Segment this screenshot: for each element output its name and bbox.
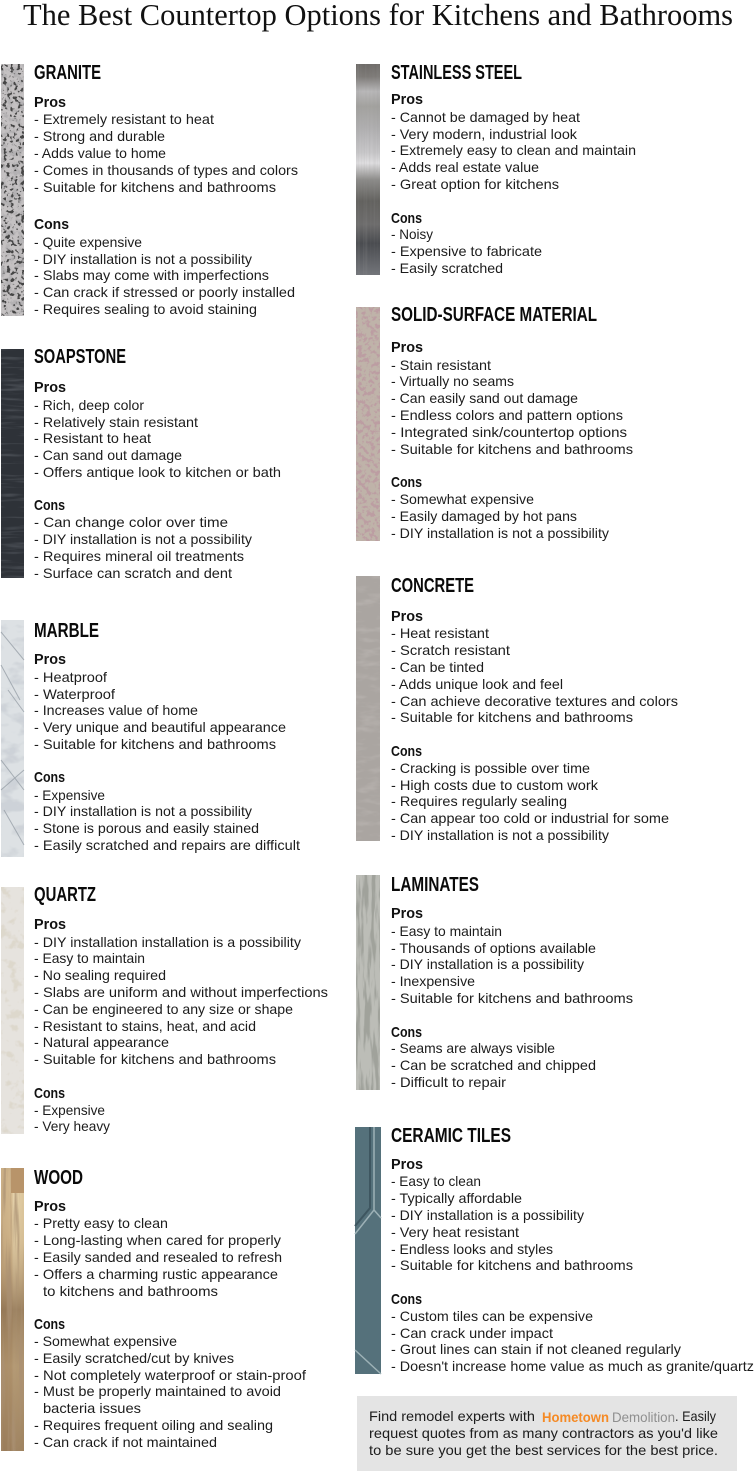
heading: concrete: CONCRETE — [391, 575, 474, 597]
cons: soapstone: - Can change color over time — [34, 514, 228, 530]
pros: wood: to kitchens and bathrooms — [43, 1283, 218, 1299]
cons: wood: - Not completely waterproof or stain-proof — [34, 1367, 306, 1383]
pros: solid-surface material: - Integrated sink/countertop options — [391, 424, 627, 440]
panel: soapstone — [1, 346, 281, 581]
pros: solid-surface material — [391, 339, 633, 457]
panel: wood — [1, 1167, 306, 1451]
texture: solid-surface strip — [356, 307, 380, 541]
panel: ceramic tiles — [355, 1125, 754, 1374]
cons: soapstone: - Requires mineral oil treatments — [34, 548, 244, 564]
cons: soapstone: - DIY installation is not a possibility — [34, 531, 252, 547]
cons: laminates: - Seams are always visible — [391, 1040, 555, 1056]
pros: ceramic tiles — [391, 1156, 633, 1273]
texture: marble strip — [1, 620, 24, 857]
pros: quartz: - Natural appearance — [34, 1034, 169, 1050]
texture: ceramic tile strip — [355, 1127, 381, 1374]
cons: ceramic tiles: - Doesn't increase home value as much as granite/quartz — [391, 1358, 754, 1374]
cons: quartz — [34, 1085, 110, 1134]
pros: concrete — [391, 608, 678, 725]
pros: concrete: - Suitable for kitchens and bathrooms — [391, 709, 633, 725]
pros: wood: Pros — [34, 1198, 66, 1215]
cons: concrete: Cons — [391, 743, 422, 760]
pros: quartz: - Can be engineered to any size or shape — [34, 1001, 293, 1017]
pros: stainless steel — [391, 91, 636, 192]
logo: Hometown Demolition — [542, 1409, 675, 1425]
pros: solid-surface material: - Endless colors and pattern options — [391, 407, 623, 423]
cons: wood: - Requires frequent oiling and sealing — [34, 1417, 273, 1433]
cons: ceramic tiles: - Can crack under impact — [391, 1325, 553, 1341]
texture: granite strip — [1, 64, 24, 316]
panel: solid-surface material — [356, 304, 633, 541]
cons: granite: Cons — [34, 216, 69, 233]
cons: solid-surface material: - Easily damaged by hot pans — [391, 508, 577, 524]
cons: stainless steel: - Easily scratched — [391, 260, 503, 276]
pros: granite: - Extremely resistant to heat — [34, 111, 214, 127]
heading: granite: GRANITE — [34, 62, 101, 84]
cons: laminates — [391, 1024, 596, 1090]
pros: quartz: - Easy to maintain — [34, 950, 145, 966]
pros: quartz: - DIY installation installation is a possibility — [34, 934, 301, 950]
pros: concrete: Pros — [391, 608, 423, 625]
pros: marble: - Suitable for kitchens and bathrooms — [34, 736, 276, 752]
cons: granite: - DIY installation is not a possibility — [34, 251, 252, 267]
pros: solid-surface material: Pros — [391, 339, 423, 356]
pros: soapstone: - Relatively stain resistant — [34, 414, 198, 430]
pros: ceramic tiles: - Very heat resistant — [391, 1224, 519, 1240]
heading: marble: MARBLE — [34, 620, 99, 642]
pros: quartz — [34, 916, 328, 1067]
heading: quartz: QUARTZ — [34, 884, 96, 906]
pros: soapstone: - Offers antique look to kitchen or bath — [34, 464, 281, 480]
pros: wood: - Pretty easy to clean — [34, 1215, 168, 1231]
cons: concrete — [391, 743, 669, 843]
cons: stainless steel: - Noisy — [391, 226, 433, 242]
cons: marble: - DIY installation is not a possibility — [34, 803, 252, 819]
texture: soapstone strip — [1, 349, 24, 578]
pros: marble — [34, 651, 286, 752]
texture: concrete strip — [356, 576, 380, 841]
panel: granite — [1, 62, 298, 317]
pros: granite: - Adds value to home — [34, 145, 166, 161]
cons: concrete: - DIY installation is not a possibility — [391, 827, 609, 843]
cons: soapstone — [34, 497, 252, 581]
pros: ceramic tiles: - Easy to clean — [391, 1173, 481, 1189]
cons: concrete: - Requires regularly sealing — [391, 793, 567, 809]
pros: concrete: - Can achieve decorative textures and colors — [391, 693, 678, 709]
pros: quartz: - Slabs are uniform and without imperfections — [34, 984, 328, 1000]
pros: stainless steel: - Great option for kitchens — [391, 176, 559, 192]
pros: marble: Pros — [34, 651, 66, 668]
cons: laminates: - Difficult to repair — [391, 1074, 506, 1090]
pros: granite: Pros — [34, 94, 66, 111]
pros: laminates: - Inexpensive — [391, 973, 475, 989]
pros: granite: - Strong and durable — [34, 128, 165, 144]
pros: granite — [34, 94, 298, 195]
cons: ceramic tiles: - Custom tiles can be expensive — [391, 1308, 593, 1324]
pros: quartz: - Suitable for kitchens and bathrooms — [34, 1051, 276, 1067]
pros: stainless steel: - Cannot be damaged by heat — [391, 109, 580, 125]
pros: stainless steel: - Extremely easy to clean and maintain — [391, 142, 636, 158]
pros: ceramic tiles: - Suitable for kitchens and bathrooms — [391, 1257, 633, 1273]
texture: laminates strip — [356, 875, 380, 1090]
pros: concrete: - Scratch resistant — [391, 642, 510, 658]
cons: concrete: - Can appear too cold or industrial for some — [391, 810, 669, 826]
cons: wood: bacteria issues — [43, 1400, 141, 1416]
pros: laminates — [391, 905, 633, 1006]
cons: ceramic tiles: - Grout lines can stain if not cleaned regularly — [391, 1341, 681, 1357]
pros: concrete: - Heat resistant — [391, 625, 489, 641]
pros: solid-surface material: - Virtually no seams — [391, 373, 514, 389]
callout: find remodel experts: request quotes from as many contractors as you'd like — [369, 1425, 718, 1441]
cons: quartz: - Expensive — [34, 1102, 105, 1118]
callout: find remodel experts: Find remodel experts with — [369, 1408, 535, 1424]
cons: wood: - Easily scratched/cut by knives — [34, 1350, 234, 1366]
cons: wood: Cons — [34, 1316, 65, 1333]
heading: stainless steel: STAINLESS STEEL — [391, 62, 522, 84]
cons: ceramic tiles — [391, 1291, 754, 1374]
cons: wood — [34, 1316, 306, 1450]
cons: concrete: - High costs due to custom work — [391, 777, 599, 793]
panel: laminates — [356, 874, 633, 1090]
pros: solid-surface material: - Can easily sand out damage — [391, 390, 578, 406]
cons: solid-surface material: - DIY installation is not a possibility — [391, 525, 609, 541]
callout: find remodel experts: to be sure you get the best services for the best price. — [369, 1442, 718, 1458]
pros: marble: - Very unique and beautiful appearance — [34, 719, 286, 735]
pros: concrete: - Adds unique look and feel — [391, 676, 563, 692]
texture: quartz strip — [1, 887, 24, 1134]
heading: wood: WOOD — [34, 1167, 83, 1189]
pros: ceramic tiles: - Endless looks and styles — [391, 1241, 553, 1257]
pros: wood: - Easily sanded and resealed to refresh — [34, 1249, 282, 1265]
pros: soapstone: - Rich, deep color — [34, 397, 144, 413]
callout: find remodel experts — [357, 1396, 737, 1471]
pros: quartz: - Resistant to stains, heat, and acid — [34, 1018, 256, 1034]
cons: quartz: - Very heavy — [34, 1118, 110, 1134]
pros: laminates: - Easy to maintain — [391, 923, 502, 939]
pros: stainless steel: - Very modern, industrial look — [391, 126, 578, 142]
pros: solid-surface material: - Stain resistant — [391, 357, 491, 373]
pros: laminates: - Thousands of options available — [391, 940, 596, 956]
heading: laminates: LAMINATES — [391, 874, 479, 896]
cons: solid-surface material: - Somewhat expensive — [391, 491, 534, 507]
pros: marble: - Heatproof — [34, 669, 107, 685]
cons: marble: - Stone is porous and easily stained — [34, 820, 259, 836]
panel: quartz — [1, 884, 328, 1134]
cons: stainless steel: - Expensive to fabricate — [391, 243, 542, 259]
pros: ceramic tiles: - Typically affordable — [391, 1190, 522, 1206]
heading: ceramic tiles: CERAMIC TILES — [391, 1125, 511, 1147]
heading: soapstone: SOAPSTONE — [34, 346, 126, 368]
pros: laminates: - Suitable for kitchens and bathrooms — [391, 990, 633, 1006]
pros: wood — [34, 1198, 282, 1299]
panel: stainless steel — [356, 62, 636, 276]
panel: concrete — [356, 575, 678, 843]
cons: stainless steel — [391, 210, 542, 276]
texture: wood strip — [1, 1168, 24, 1451]
cons: quartz: Cons — [34, 1085, 65, 1102]
heading: solid-surface material: SOLID-SURFACE MATERIAL — [391, 304, 597, 326]
pros: wood: - Offers a charming rustic appearance — [34, 1266, 278, 1282]
cons: solid-surface material — [391, 474, 609, 541]
cons: wood: - Must be properly maintained to avoid — [34, 1383, 281, 1399]
cons: marble: - Easily scratched and repairs are difficult — [34, 837, 300, 853]
cons: wood: - Somewhat expensive — [34, 1333, 177, 1349]
cons: marble: - Expensive — [34, 787, 105, 803]
cons: laminates: - Can be scratched and chipped — [391, 1057, 596, 1073]
pros: soapstone: Pros — [34, 379, 66, 396]
cons: marble: Cons — [34, 769, 65, 786]
pros: ceramic tiles: - DIY installation is a possibility — [391, 1207, 584, 1223]
pros: granite: - Comes in thousands of types and colors — [34, 162, 298, 178]
pros: soapstone — [34, 379, 281, 480]
pros: quartz: - No sealing required — [34, 967, 166, 983]
cons: concrete: - Cracking is possible over time — [391, 760, 590, 776]
callout: find remodel experts: . Easily — [675, 1408, 716, 1424]
cons: soapstone: Cons — [34, 497, 65, 514]
pros: wood: - Long-lasting when cared for properly — [34, 1232, 281, 1248]
pros: solid-surface material: - Suitable for kitchens and bathrooms — [391, 441, 633, 457]
pros: soapstone: - Resistant to heat — [34, 430, 151, 446]
panel: marble — [1, 620, 300, 857]
cons: laminates: Cons — [391, 1024, 422, 1041]
cons: solid-surface material: Cons — [391, 474, 422, 491]
cons: stainless steel: Cons — [391, 210, 422, 227]
cons: granite: - Can crack if stressed or poorly installed — [34, 284, 295, 300]
pros: ceramic tiles: Pros — [391, 1156, 423, 1173]
logo: Hometown Demolition: Hometown — [542, 1409, 609, 1425]
cons: marble — [34, 769, 300, 853]
pros: stainless steel: Pros — [391, 91, 423, 108]
pros: soapstone: - Can sand out damage — [34, 447, 182, 463]
pros: laminates: Pros — [391, 905, 423, 922]
pros: laminates: - DIY installation is a possibility — [391, 956, 584, 972]
cons: granite: - Quite expensive — [34, 234, 142, 250]
pros: stainless steel: - Adds real estate value — [391, 159, 539, 175]
cons: granite: - Slabs may come with imperfections — [34, 267, 269, 283]
pros: granite: - Suitable for kitchens and bathrooms — [34, 179, 276, 195]
pros: marble: - Increases value of home — [34, 702, 198, 718]
cons: granite — [34, 216, 295, 317]
logo: Hometown Demolition: Demolition — [612, 1409, 675, 1425]
pros: marble: - Waterproof — [34, 686, 115, 702]
pros: quartz: Pros — [34, 916, 66, 933]
texture: stainless steel strip — [356, 64, 380, 275]
cons: soapstone: - Surface can scratch and dent — [34, 565, 232, 581]
pros: concrete: - Can be tinted — [391, 659, 484, 675]
cons: granite: - Requires sealing to avoid staining — [34, 301, 257, 317]
cons: wood: - Can crack if not maintained — [34, 1434, 217, 1450]
cons: ceramic tiles: Cons — [391, 1291, 422, 1308]
